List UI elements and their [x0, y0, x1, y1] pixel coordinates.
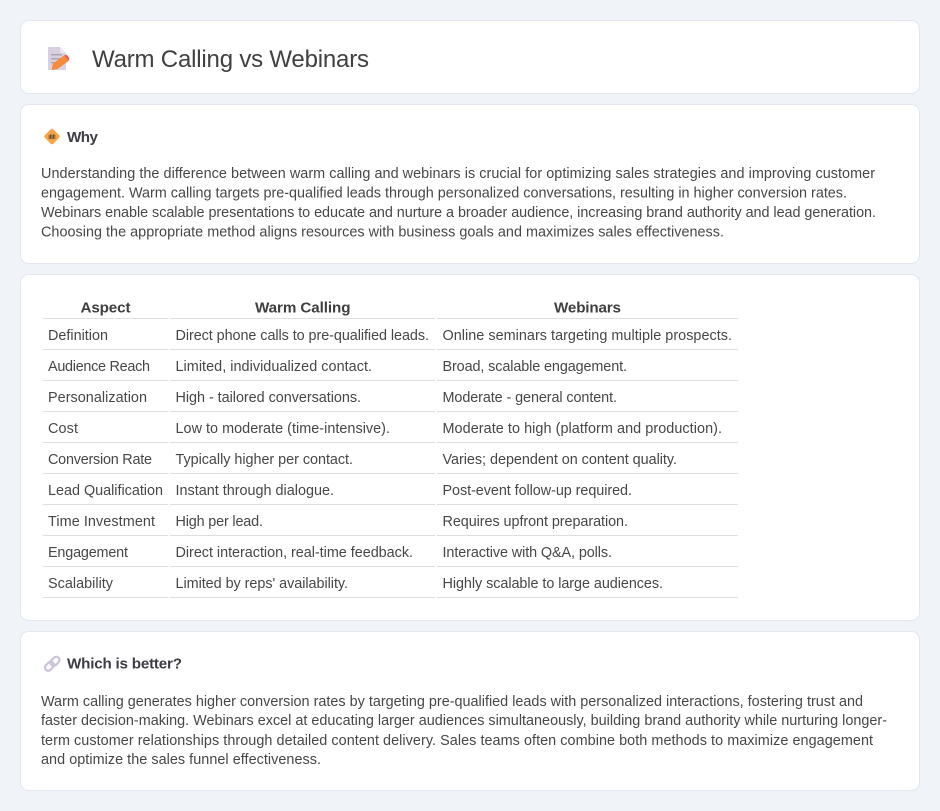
- row: time investment: [48, 514, 628, 530]
- row: time investment: Requires upfront preparation.: [442, 514, 628, 530]
- row: audience reach: Audience Reach: [48, 359, 150, 375]
- panel: title header: [20, 20, 920, 94]
- row: definition: Online seminars targeting multiple prospects.: [442, 328, 732, 344]
- title: Warm Calling vs Webinars: [92, 46, 369, 73]
- heading: why: Why: [67, 129, 99, 146]
- table header row: Warm Calling: [255, 300, 350, 316]
- row: lead qualification: Lead Qualification: [48, 483, 163, 499]
- row: cost: Low to moderate (time-intensive).: [176, 421, 390, 437]
- row: engagement: Direct interaction, real-time feedback.: [176, 545, 413, 561]
- text block: why paragraph: [41, 166, 876, 240]
- row: conversion rate: [48, 452, 677, 468]
- row: audience reach: Limited, individualized contact.: [176, 359, 372, 375]
- row: audience reach: [48, 359, 627, 375]
- table header row: Aspect: [80, 300, 130, 316]
- row: cost: Cost: [48, 421, 78, 437]
- row: engagement: Engagement: [48, 545, 128, 561]
- text block: which is better paragraph: and optimize the sales funnel effectiveness.: [41, 752, 321, 768]
- row: time investment: High per lead.: [176, 514, 263, 530]
- table header row: [80, 300, 621, 316]
- row: personalization: Moderate - general content.: [442, 390, 617, 406]
- row: definition: [48, 328, 732, 344]
- row: definition: Definition: [48, 328, 108, 344]
- row: audience reach: Broad, scalable engagement.: [442, 359, 627, 375]
- text block: which is better paragraph: Warm calling generates higher conversion rates by targeting pre-qualified leads with personalized interactions, fostering trust and: [41, 694, 863, 710]
- panel: which is better: [20, 632, 920, 790]
- table header row: Webinars: [554, 300, 621, 316]
- text block: why paragraph: Choosing the appropriate method aligns resources with business goals and maximizes sales effectiveness.: [41, 224, 724, 240]
- row: scalability: [48, 576, 663, 592]
- text block: why paragraph: Webinars enable scalable presentations to educate and nurture a broader audience, increasing brand authority and lead generation.: [41, 205, 876, 221]
- row: personalization: [48, 390, 617, 406]
- row: personalization: Personalization: [48, 390, 147, 406]
- text block: which is better paragraph: [41, 694, 887, 768]
- icon: warning diamond: [44, 128, 60, 145]
- row: lead qualification: [48, 483, 632, 499]
- row: personalization: High - tailored conversations.: [176, 390, 361, 406]
- row: cost: [48, 421, 722, 437]
- icon: chain link: [44, 655, 61, 672]
- row: lead qualification: Post-event follow-up required.: [442, 483, 632, 499]
- row: lead qualification: Instant through dialogue.: [176, 483, 334, 499]
- heading: which is better: Which is better?: [67, 656, 182, 672]
- row: conversion rate: Typically higher per contact.: [176, 452, 353, 468]
- row: conversion rate: Conversion Rate: [48, 452, 152, 468]
- row: engagement: [48, 545, 612, 561]
- row: cost: Moderate to high (platform and production).: [442, 421, 722, 437]
- text block: which is better paragraph: term customer relationships through detailed content delivery. Sales teams often combine both methods to maximize engagement: [41, 733, 873, 749]
- row: definition: Direct phone calls to pre-qualified leads.: [176, 328, 429, 344]
- row: scalability: Limited by reps' availability.: [176, 576, 348, 592]
- row: time investment: Time Investment: [48, 514, 155, 530]
- row: scalability: Highly scalable to large audiences.: [442, 576, 663, 592]
- text block: why paragraph: Understanding the difference between warm calling and webinars is crucial for optimizing sales strategies and improving customer: [41, 166, 875, 182]
- row: scalability: Scalability: [48, 576, 114, 592]
- text block: why paragraph: engagement. Warm calling targets pre-qualified leads through personalized conversations, resulting in higher conversion rates.: [41, 186, 847, 202]
- table row lines: [43, 318, 738, 598]
- text block: which is better paragraph: faster decision-making. Webinars excel at educating larger audiences simultaneously, building brand authority while nurturing longer-: [41, 713, 887, 729]
- row: conversion rate: Varies; dependent on content quality.: [442, 452, 677, 468]
- panel: why: [20, 104, 920, 264]
- icon: document with pencil: [48, 47, 70, 70]
- panel: comparison table: [20, 274, 920, 620]
- row: engagement: Interactive with Q&A, polls.: [442, 545, 612, 561]
